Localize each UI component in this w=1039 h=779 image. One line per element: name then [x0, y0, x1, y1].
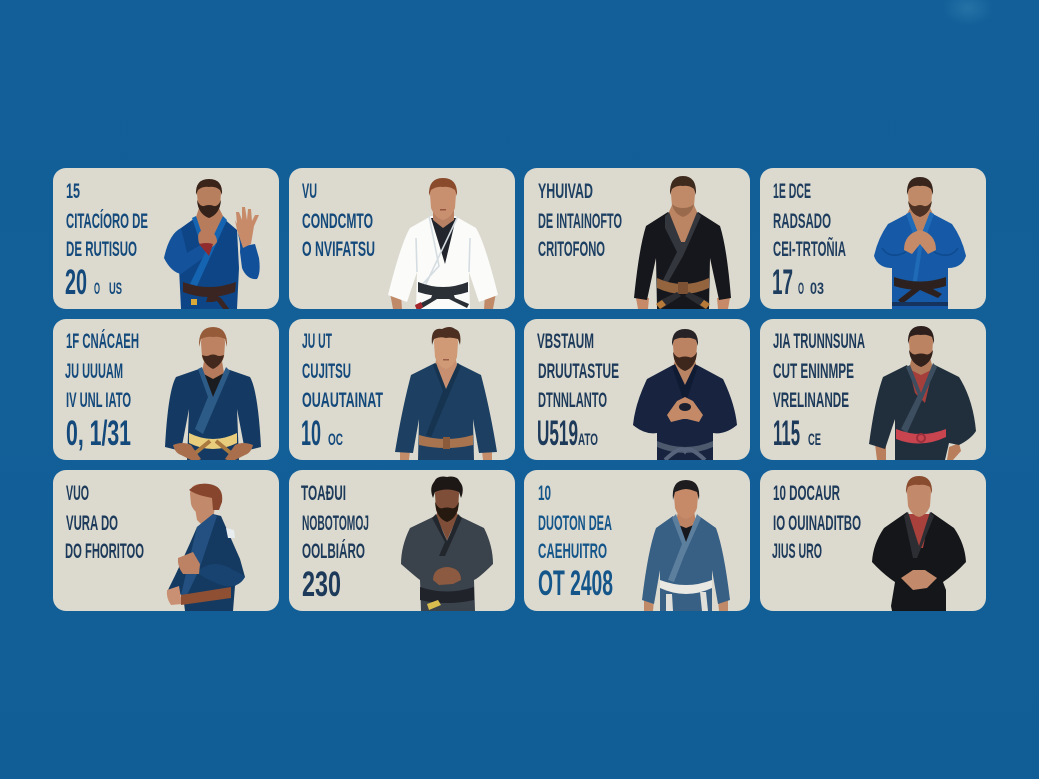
- figure: navy gi, yellow belt: [165, 327, 261, 462]
- figure: slate blue gi, white belt, faceless: [642, 480, 730, 611]
- text block: card 1: CITACÍORO DE: [66, 210, 148, 233]
- text block: card 3: DE INTAINOFTO: [538, 210, 622, 233]
- text block: card 2: CONDCMTO: [302, 210, 373, 233]
- text block: card 3: [538, 180, 622, 261]
- text block: card 11: CAEHUITRO: [538, 540, 607, 563]
- panel: card 11: [524, 470, 750, 611]
- text block: card 12: IO OUINADITBO: [773, 512, 861, 535]
- panel: card 2: [289, 168, 515, 311]
- figure: grey gi, dark belt, curly hair: [401, 477, 493, 611]
- text block: card 6: CUJITSU: [302, 360, 351, 383]
- text block: card 11: [538, 482, 613, 603]
- text block: card 7: [537, 330, 619, 453]
- text block: card 7: ATO: [578, 430, 598, 449]
- panel: card 9: [53, 470, 279, 611]
- figure: black gi, red undershirt: [872, 476, 966, 611]
- panel: card 6: [289, 319, 515, 460]
- text block: card 9: [65, 482, 144, 563]
- figure: side view, navy gi, brown belt: [167, 484, 245, 611]
- text block: card 6: [301, 330, 383, 453]
- text block: card 7: DRUUTASTUE: [538, 360, 619, 383]
- text block: card 1: 20: [65, 263, 87, 302]
- text block: card 4: 17: [772, 263, 793, 302]
- text block: card 8: JIA TRUNNSUNA: [773, 330, 865, 353]
- text block: card 2: VU: [302, 180, 317, 203]
- text block: card 9: VUO: [66, 482, 89, 505]
- text block: card 10: [301, 482, 369, 604]
- text block: card 4: O: [798, 279, 804, 298]
- text block: card 11: OT 2408: [538, 564, 613, 603]
- text block: card 4: [772, 180, 846, 302]
- text block: card 10: 230: [302, 565, 341, 604]
- text block: card 5: 0, 1/31: [66, 414, 131, 453]
- text block: card 12: [772, 482, 861, 563]
- text block: card 3: YHUIVAD: [538, 180, 593, 203]
- text block: card 3: CRITOFONO: [538, 238, 605, 261]
- text block: card 6: OC: [328, 430, 343, 449]
- text block: card 4: CEI-TRTOÑIA: [773, 238, 846, 261]
- text block: card 8: CUT ENINMPE: [773, 360, 854, 383]
- text block: card 7: VBSTAUM: [537, 330, 594, 353]
- text block: card 5: [65, 330, 139, 453]
- text block: card 9: DO FHORITOO: [65, 540, 144, 563]
- text block: card 10: TOAÐUI: [301, 482, 346, 505]
- text block: card 8: CE: [808, 430, 821, 449]
- text block: card 2: [302, 180, 375, 261]
- text block: card 1: O: [94, 279, 100, 298]
- text block: card 2: O NVIFATSU: [302, 238, 375, 261]
- text block: card 7: DTNNLANTO: [538, 389, 607, 412]
- text block: card 4: RADSADO: [773, 210, 831, 233]
- figure: dark navy gi, hands together: [633, 329, 737, 460]
- text block: card 12: JIUS URO: [772, 540, 822, 563]
- text block: card 1: [65, 180, 148, 302]
- text block: card 1: DE RUTISUO: [66, 238, 137, 261]
- text block: card 4: 03: [810, 279, 824, 298]
- text block: card 8: VRELINANDE: [773, 389, 849, 412]
- text block: card 1: US: [109, 279, 122, 298]
- text block: card 6: JU UT: [302, 330, 332, 353]
- panel: card 12: [760, 470, 986, 611]
- figure: black gi, brown belt: [634, 176, 731, 309]
- panel: card 8: [760, 319, 986, 460]
- panel: card 10: [289, 470, 515, 611]
- text block: card 10: OOLBIÁRO: [302, 540, 365, 563]
- text block: card 5: IV UNL IATO: [66, 389, 131, 412]
- text block: card 11: DUOTON DEA: [538, 512, 612, 535]
- panel: card 7: [524, 319, 750, 460]
- text block: card 12: 10 DOCAUR: [773, 482, 840, 505]
- panel: card 5: [53, 319, 279, 462]
- text block: card 5: 1F CNÁCAEH: [66, 330, 139, 353]
- panel: card 3: [524, 168, 750, 309]
- text block: card 5: JU UUUAM: [65, 360, 123, 383]
- text block: card 9: VURA DO: [66, 512, 118, 535]
- panel: card 4: [760, 168, 986, 309]
- text block: card 8: 115: [773, 414, 800, 453]
- text block: card 4: 1E DCE: [773, 180, 811, 203]
- panel: card 1: [53, 168, 279, 314]
- panel: card 10: NOBOTOMOJ: [302, 512, 369, 535]
- figure: charcoal gi, red belt: [869, 326, 976, 460]
- figure: blue gi, raised hand: [164, 179, 260, 314]
- text block: card 7: U519: [537, 414, 578, 453]
- text block: card 6: 10: [301, 414, 321, 453]
- text block: card 11: 10: [538, 482, 551, 505]
- figure: dark blue gi, brown belt: [395, 327, 497, 460]
- text block: card 1: 15: [66, 180, 80, 203]
- text block: card 6: OUAUTAINAT: [302, 389, 383, 412]
- figure: blue gi, hands at chest: [874, 177, 966, 309]
- text block: card 8: [773, 330, 865, 453]
- figure: white gi, black belt: [388, 178, 498, 311]
